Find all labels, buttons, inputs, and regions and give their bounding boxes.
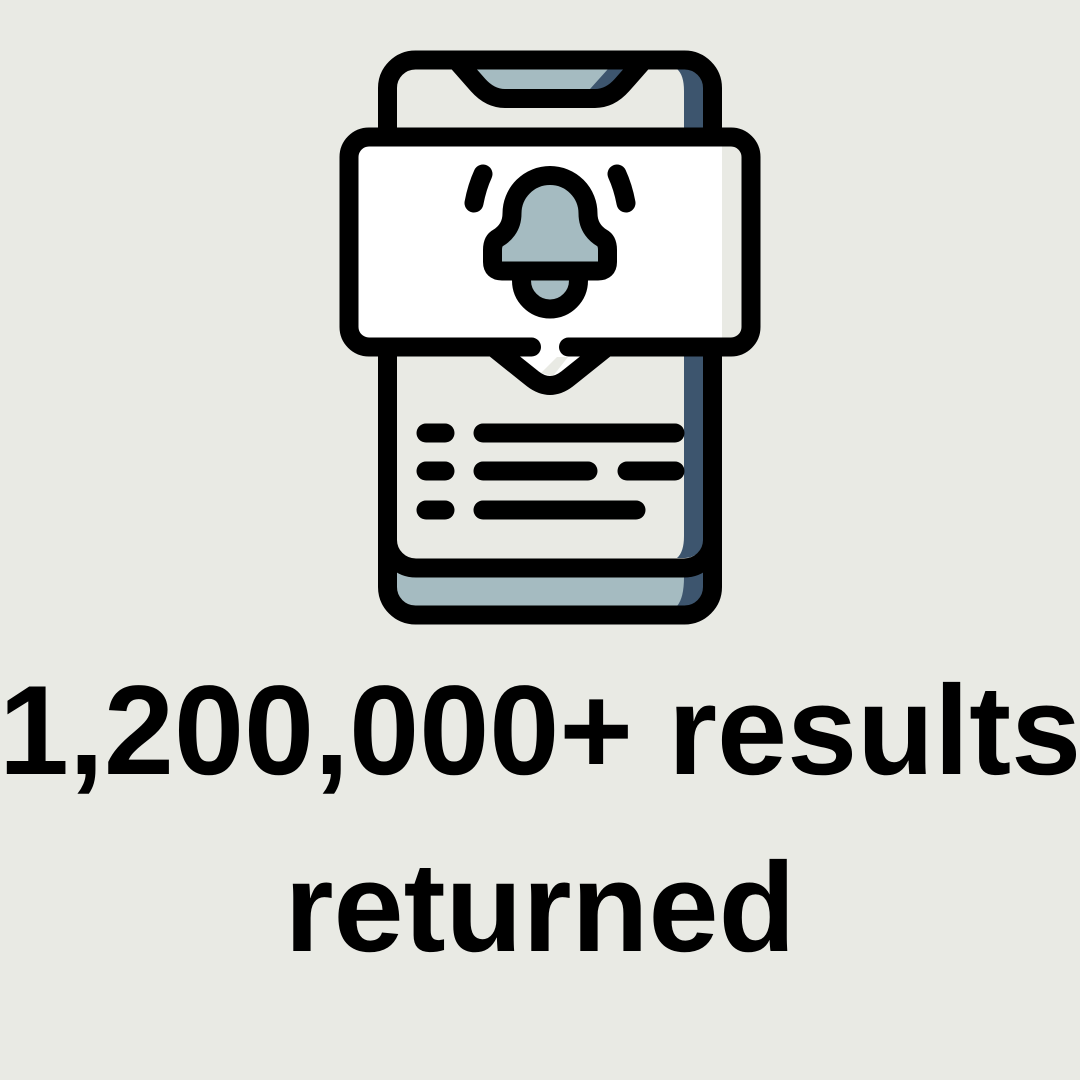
phone body <box>388 60 712 615</box>
icon: phone with notification bell <box>340 50 760 624</box>
heading line 2: returned <box>284 836 796 978</box>
clapper <box>522 271 578 309</box>
phone outline <box>388 60 712 615</box>
chin divider <box>388 540 712 568</box>
bottom chin fill <box>396 568 704 606</box>
notification bubble <box>349 137 751 386</box>
text lines <box>426 433 675 510</box>
right shadow strip <box>677 69 704 558</box>
notch fill <box>474 66 626 89</box>
notch outline <box>456 60 644 98</box>
bell body <box>492 176 608 271</box>
heading line 1: 1,200,000+ results <box>0 659 1080 801</box>
icon: bell <box>474 174 626 309</box>
sound marks <box>474 174 626 203</box>
bubble body <box>349 137 751 347</box>
bubble tail <box>493 347 607 386</box>
